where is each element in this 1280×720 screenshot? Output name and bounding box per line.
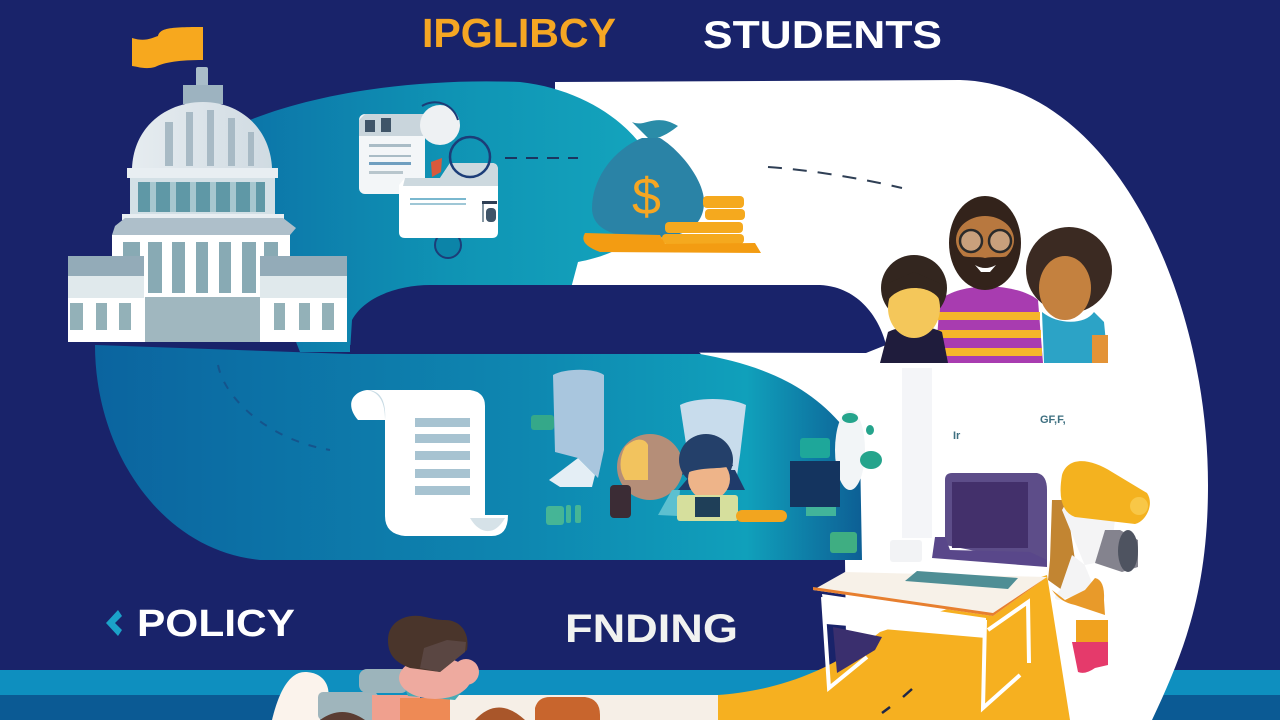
keyboard xyxy=(905,571,1018,589)
icon: left arrow xyxy=(106,610,122,636)
small labels: garbled xyxy=(953,414,1066,442)
right wing xyxy=(260,256,347,342)
wall stripe xyxy=(902,368,932,538)
icon: hourglass jar xyxy=(531,370,604,525)
dashed connector: lower flow xyxy=(218,365,330,450)
small labels: garbled: Ir xyxy=(953,430,961,442)
coins xyxy=(662,196,745,244)
icon: policy documents xyxy=(359,102,498,258)
panel: teal upper flow xyxy=(240,81,656,352)
yellow floor swoosh xyxy=(718,575,1070,720)
illustration: desk with computer xyxy=(813,473,1047,713)
illustration: person with yellow helmet xyxy=(1048,461,1150,673)
heading: policy garbled: IPGLIBCY xyxy=(422,10,616,56)
illustration: family of students xyxy=(880,196,1112,363)
icon: money bag with coins: $ xyxy=(632,168,661,226)
child xyxy=(880,255,948,363)
small labels: garbled: GF,F, xyxy=(1040,414,1066,426)
dashed connector: documents to money xyxy=(505,157,578,159)
icon: scroll document xyxy=(351,390,508,536)
woman xyxy=(1026,227,1112,363)
icon: capitol building xyxy=(68,27,347,342)
panel: blue lower flow xyxy=(95,345,862,560)
illustration: students at the bottom xyxy=(272,616,600,720)
navy pocket between flows xyxy=(350,285,886,353)
dashed connector: money to students xyxy=(768,167,902,188)
heading: policy with arrow: POLICY xyxy=(137,603,295,645)
heading: funding garbled: FNDING xyxy=(565,607,738,651)
left wing xyxy=(68,256,144,342)
heading: students: STUDENTS xyxy=(703,14,942,57)
white flow path xyxy=(555,80,1208,720)
document two xyxy=(399,163,498,238)
desk body and legs xyxy=(822,594,986,638)
man xyxy=(935,196,1043,363)
icon: flag xyxy=(132,27,203,68)
document one xyxy=(359,114,425,194)
illustration: student studying with globe xyxy=(610,399,787,522)
monitor xyxy=(932,473,1047,567)
decorative plants and dark card xyxy=(790,410,882,553)
icon: money bag with coins xyxy=(583,120,761,253)
bottom band xyxy=(0,670,1280,720)
bottom strip: cream panel xyxy=(450,695,718,720)
desktop surface xyxy=(813,572,1047,616)
